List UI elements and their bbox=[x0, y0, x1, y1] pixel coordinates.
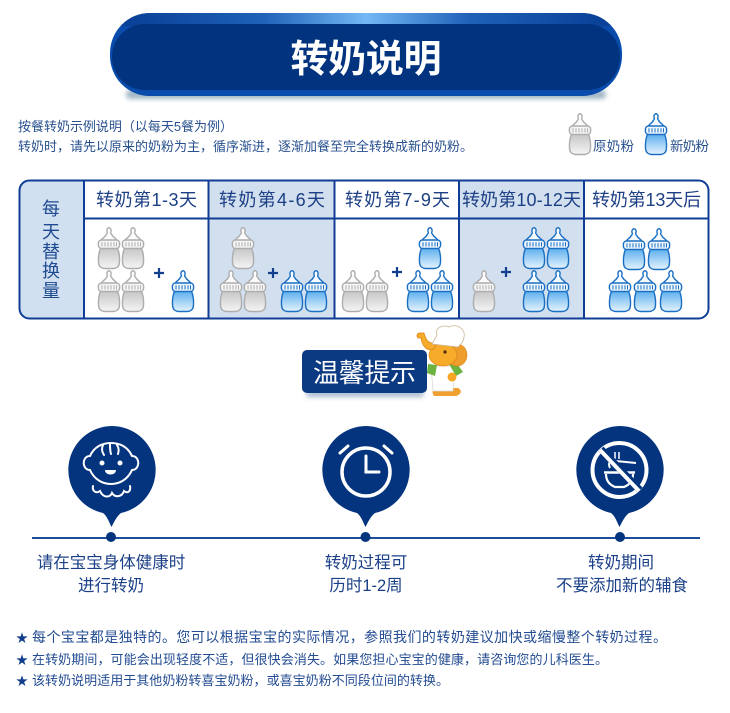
schedule table bbox=[19, 180, 709, 319]
tip 3: no new food bbox=[556, 426, 688, 595]
row label: 天 bbox=[42, 222, 60, 242]
column headers: 转奶第7-9天 bbox=[345, 190, 450, 210]
bottles: days 1-3 bbox=[98, 228, 194, 312]
row label: 替 bbox=[42, 242, 60, 262]
note 2: 在转奶期间，可能会出现轻度不适，但很快会消失。如果您担心宝宝的健康，请咨询您的儿科医生。 bbox=[32, 652, 608, 667]
bottles: days 7-9 bbox=[342, 228, 453, 312]
table frame bbox=[20, 180, 708, 318]
footnotes bbox=[16, 629, 667, 688]
caption: 进行转奶 bbox=[78, 576, 144, 595]
icon: baby face pin bbox=[68, 426, 156, 527]
legend label: new formula: 新奶粉 bbox=[670, 139, 710, 154]
caption: 历时1-2周 bbox=[329, 576, 403, 595]
column headers bbox=[96, 190, 701, 210]
timeline dot bbox=[106, 532, 116, 542]
note 1: ★ bbox=[16, 631, 28, 645]
shaded column 10-12 days bbox=[459, 180, 584, 319]
column headers: 转奶第4-6天 bbox=[219, 190, 325, 210]
shaded column 4-6 days bbox=[209, 180, 335, 319]
caption: 请在宝宝身体健康时 bbox=[37, 553, 185, 572]
row label: 换 bbox=[42, 261, 60, 281]
bottles: days 10-12 bbox=[473, 228, 569, 312]
tip 1: baby health bbox=[37, 426, 185, 595]
legend label: original formula: 原奶粉 bbox=[593, 139, 634, 154]
icon: original formula bottle bbox=[569, 114, 591, 154]
timeline dot bbox=[615, 532, 625, 542]
column headers: 转奶第1-3天 bbox=[96, 190, 197, 210]
caption: 转奶期间 bbox=[588, 553, 654, 572]
timeline axis bbox=[32, 537, 700, 539]
caption bbox=[325, 553, 407, 595]
icon: no food pin bbox=[576, 426, 664, 527]
caption: 转奶过程可 bbox=[325, 553, 407, 572]
bottles: day 13 onward bbox=[609, 229, 682, 312]
tips badge bbox=[302, 350, 427, 397]
icon: new formula bottle bbox=[645, 114, 667, 154]
intro text block: 按餐转奶示例说明（以每天5餐为例） bbox=[18, 119, 233, 134]
caption: 不要添加新的辅食 bbox=[556, 576, 688, 595]
timeline dot bbox=[360, 532, 370, 542]
column headers: 转奶第13天后 bbox=[592, 190, 701, 210]
intro text block bbox=[18, 119, 473, 154]
legend bbox=[569, 114, 710, 154]
tip 2: duration bbox=[322, 426, 410, 595]
note 3: ★ bbox=[16, 674, 28, 688]
row label: 每 bbox=[42, 199, 60, 219]
heading: 转奶说明: 转奶说明 bbox=[290, 39, 442, 81]
heading: 温馨提示: 温馨提示 bbox=[313, 358, 416, 388]
bottles: days 4-6 bbox=[220, 228, 327, 312]
caption bbox=[556, 553, 688, 595]
title banner bbox=[110, 13, 622, 99]
icon: elephant chef mascot bbox=[417, 326, 467, 396]
row label: 量 bbox=[42, 281, 60, 301]
caption bbox=[37, 553, 185, 595]
note 2: ★ bbox=[16, 653, 28, 667]
intro text block: 转奶时，请先以原来的奶粉为主，循序渐进，逐渐加餐至完全转换成新的奶粉。 bbox=[18, 139, 473, 154]
note 1: 每个宝宝都是独特的。您可以根据宝宝的实际情况，参照我们的转奶建议加快或缩慢整个转奶过程。 bbox=[32, 629, 667, 645]
timeline bbox=[32, 426, 700, 595]
row label bbox=[42, 199, 60, 301]
column headers: 转奶第10-12天 bbox=[462, 190, 581, 210]
left label cell background bbox=[19, 180, 84, 319]
icon: alarm clock pin bbox=[322, 426, 410, 527]
note 3: 该转奶说明适用于其他奶粉转喜宝奶粉，或喜宝奶粉不同段位间的转换。 bbox=[32, 673, 449, 688]
